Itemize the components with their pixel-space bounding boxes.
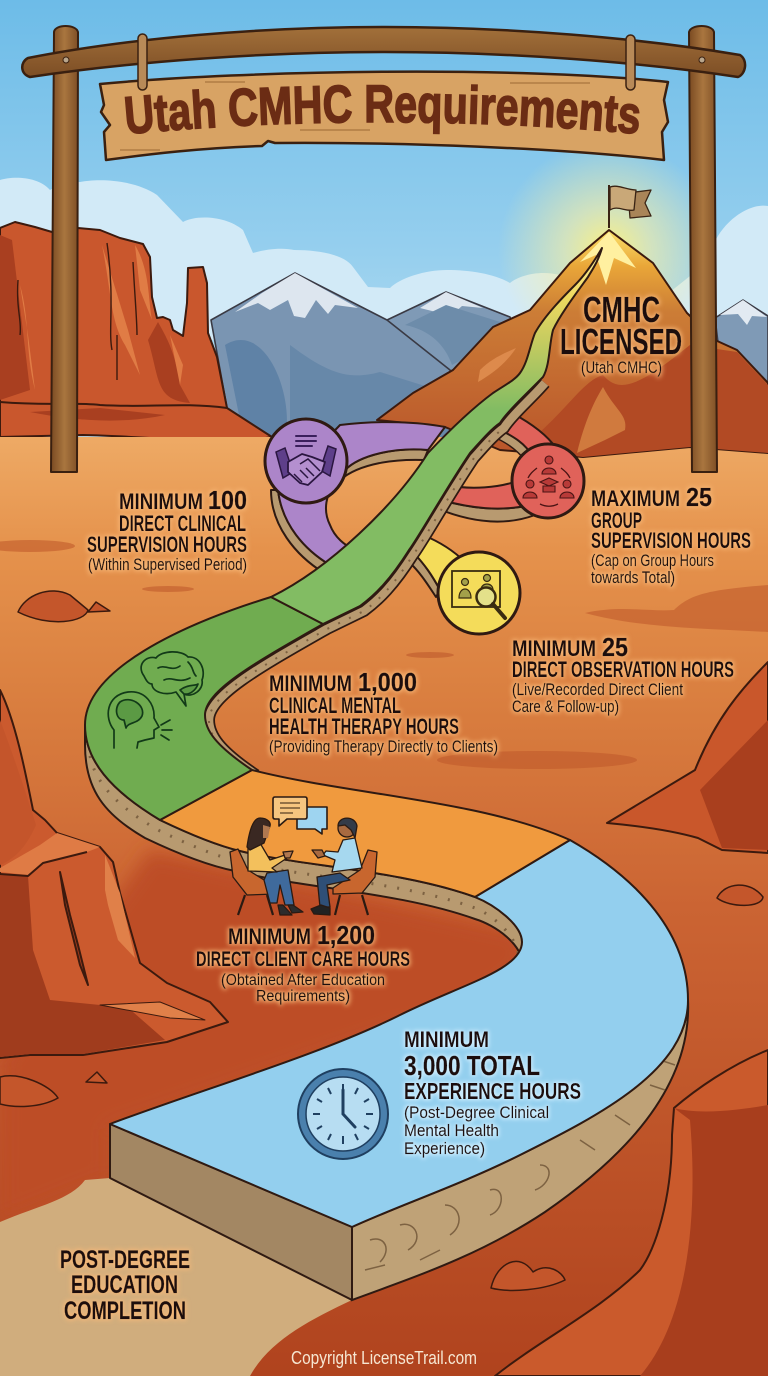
label: minimum 1,000: (Providing Therapy Directly to Clients) [269,737,498,756]
label: minimum 3,000 total: EXPERIENCE HOURS [404,1078,581,1104]
beam bolts [63,57,705,63]
label: minimum 3,000 total: (Post-Degree Clinical [404,1103,549,1122]
copyright: Copyright LicenseTrail.com [291,1348,477,1368]
right post [689,26,717,472]
label: minimum 3,000 total [404,1027,581,1158]
label: minimum 25 [512,632,734,716]
label: post-degree education completion: COMPLETION [64,1297,186,1325]
icon: brain and speaking head [108,652,203,748]
summit glow [498,140,718,360]
red branch [436,413,556,522]
small rocks [0,591,763,1290]
label: minimum 100: MINIMUM [119,489,203,514]
label: minimum 25: 25 [602,632,628,662]
label: minimum 1,000 [269,667,498,756]
icon: direct observation badge [438,552,520,634]
label: maximum 25: 25 [686,482,712,512]
icon: group supervision badge [512,444,584,518]
label: minimum 1,000: CLINICAL MENTAL [269,693,401,718]
chairs [230,849,377,915]
label: maximum 25: (Cap on Group Hours [591,551,714,570]
rock: right middle [607,662,768,853]
summit flag [609,185,651,228]
ground [0,437,768,1376]
title: Utah CMHC Requirements [124,84,640,134]
label: minimum 1,200: 1,200 [317,920,375,950]
path rock edge: lower sweep [85,725,522,966]
path rock edge: inner curve [209,383,545,775]
label: minimum 1,000: 1,000 [358,667,417,697]
rock: right bottom [495,1050,768,1376]
path front face left [110,1124,352,1300]
sand: post-degree education area [0,1178,352,1376]
label: CMHC licensed: (Utah CMHC) [581,358,662,377]
icon: handshake badge [265,419,347,503]
left butte [0,222,272,443]
background mountains: blue peaks [211,273,768,445]
label: minimum 100 [87,485,247,574]
left post [51,26,78,472]
speech bubbles [273,797,327,834]
label: minimum 3,000 total: Experience) [404,1139,485,1158]
label: minimum 3,000 total: Mental Health [404,1121,499,1140]
label: minimum 1,000: HEALTH THERAPY HOURS [269,714,459,739]
label: minimum 1,200: DIRECT CLIENT CARE HOURS [196,948,410,971]
path segment: upper green to summit [271,248,602,624]
label: post-degree education completion [60,1246,190,1325]
label: CMHC licensed [560,289,682,377]
label: maximum 25 [591,482,751,587]
path front rock face right [352,1000,688,1300]
label: minimum 100: DIRECT CLINICAL [119,511,246,536]
label: minimum 3,000 total: 3,000 TOTAL [404,1050,540,1081]
lower ground shade [0,850,530,1222]
path segment: orange direct client care [160,770,570,897]
crossbeam [22,27,745,77]
clouds [0,178,768,340]
label: minimum 100: SUPERVISION HOURS [87,532,247,557]
label: maximum 25: GROUP [591,508,642,533]
label: minimum 25: MINIMUM [512,636,596,661]
label: minimum 25: (Live/Recorded Direct Client [512,680,683,699]
label: minimum 3,000 total: MINIMUM [404,1027,489,1052]
label: post-degree education completion: POST-DEGREE [60,1246,190,1274]
path segment: green clinical therapy [85,597,323,820]
background: sky [0,0,768,460]
label: minimum 100: (Within Supervised Period) [88,555,247,574]
title sign board [100,72,668,160]
label: post-degree education completion: EDUCATION [71,1271,178,1299]
summit mountain [377,230,768,457]
woman [247,818,303,915]
purple branch [271,422,445,573]
path segment: blue total experience [110,840,688,1227]
label: minimum 25: Care & Follow-up) [512,697,619,716]
label: CMHC licensed: CMHC [583,289,660,330]
label: minimum 1,200: MINIMUM [228,924,311,949]
rock: left foreground [0,690,228,1058]
icon: counselling conversation [230,797,377,915]
label: minimum 1,200: (Obtained After Education [221,972,385,989]
yellow branch [409,535,465,597]
label: minimum 1,200 [196,920,410,1005]
label: minimum 1,200: Requirements) [256,988,350,1005]
ground details [0,540,768,769]
label: maximum 25: towards Total) [591,568,675,587]
label: maximum 25: MAXIMUM [591,486,680,511]
man [311,818,362,915]
icon: clock [298,1069,388,1159]
label: minimum 1,000: MINIMUM [269,671,352,696]
label: minimum 100: 100 [208,485,247,515]
label: CMHC licensed: LICENSED [560,321,682,362]
sign straps [138,34,635,90]
